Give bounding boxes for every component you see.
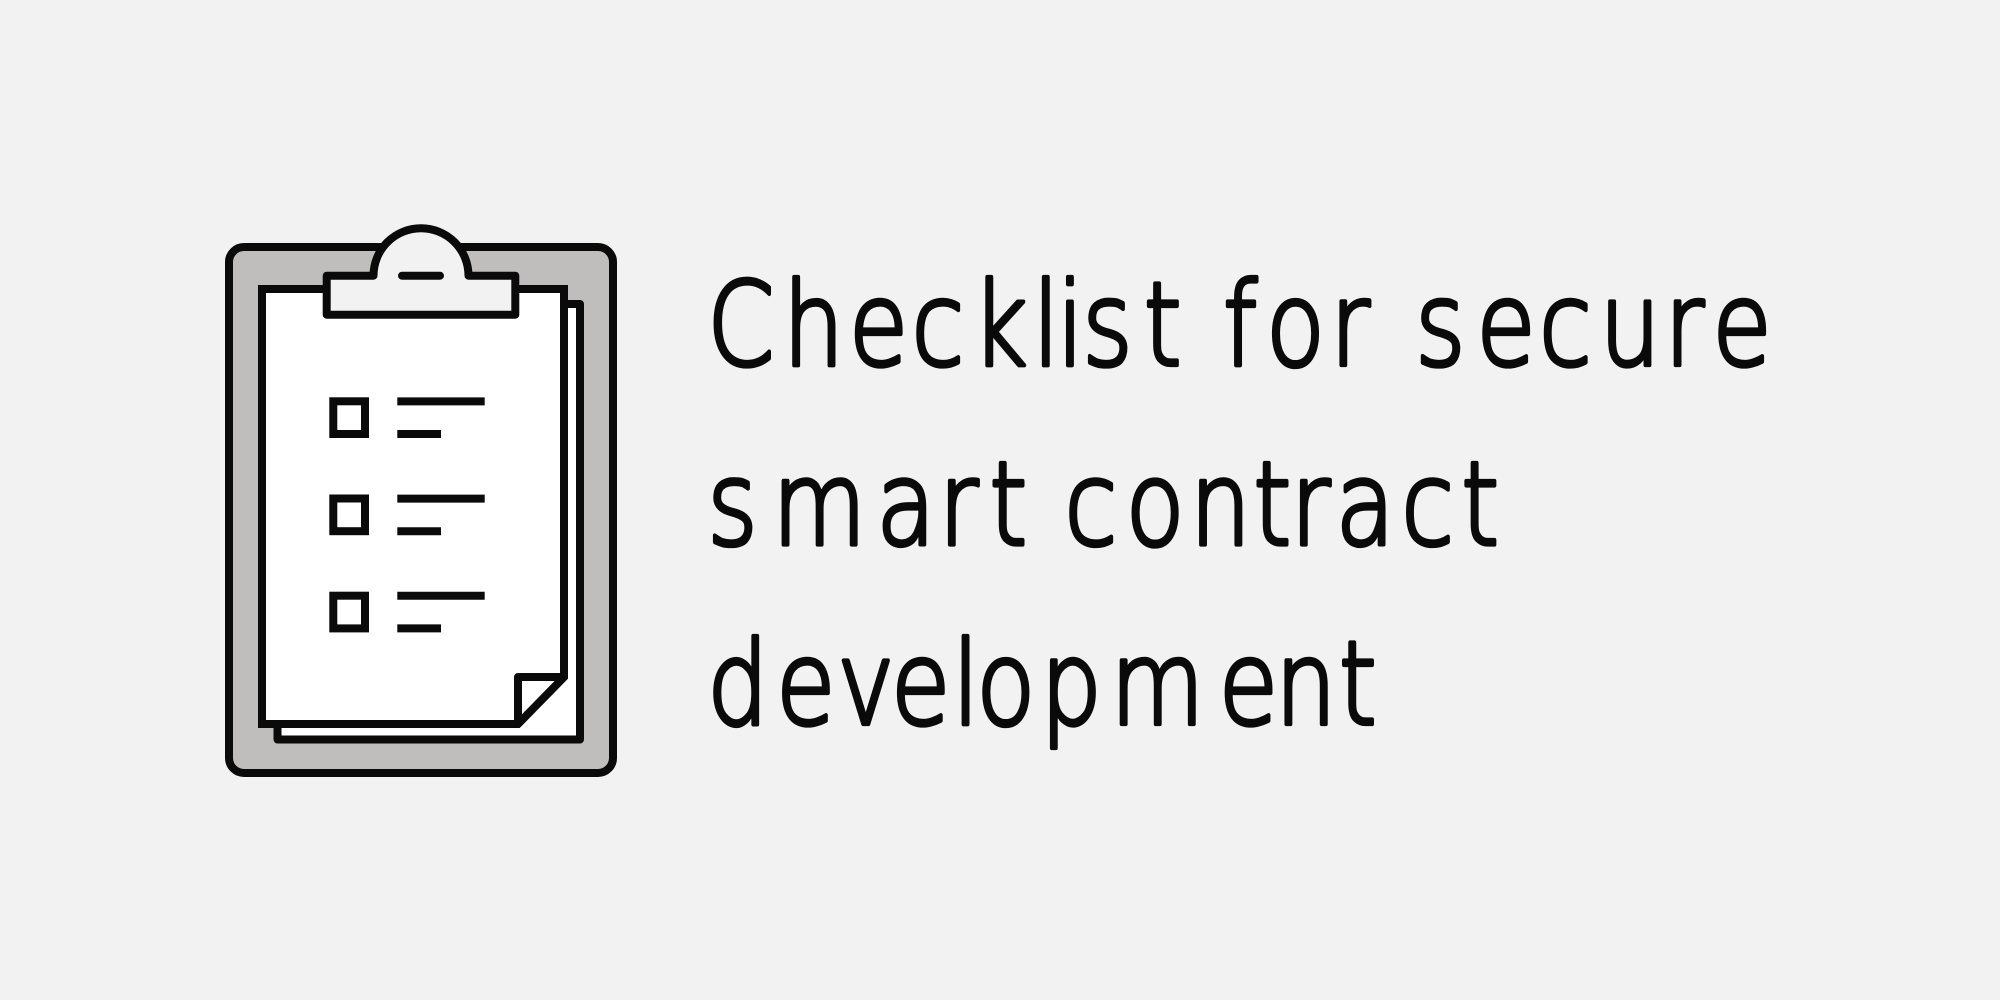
title xyxy=(707,258,1772,752)
icon: clipboard checklist xyxy=(229,228,613,773)
checklist row 1 xyxy=(333,401,485,434)
title: development xyxy=(707,617,1377,752)
title: secure xyxy=(1415,258,1772,393)
title: Checklist xyxy=(707,258,1181,393)
front sheet of paper xyxy=(262,289,564,724)
title: smart xyxy=(708,438,1027,573)
clip xyxy=(327,228,515,315)
checklist row 2 xyxy=(333,498,485,531)
clipboard board xyxy=(229,247,613,773)
back sheet of paper xyxy=(278,304,580,740)
checklist row 3 xyxy=(333,596,485,628)
folded paper corner xyxy=(518,677,564,724)
clip slot xyxy=(402,272,440,280)
title: for xyxy=(1223,258,1370,393)
title: contract xyxy=(1065,438,1499,573)
